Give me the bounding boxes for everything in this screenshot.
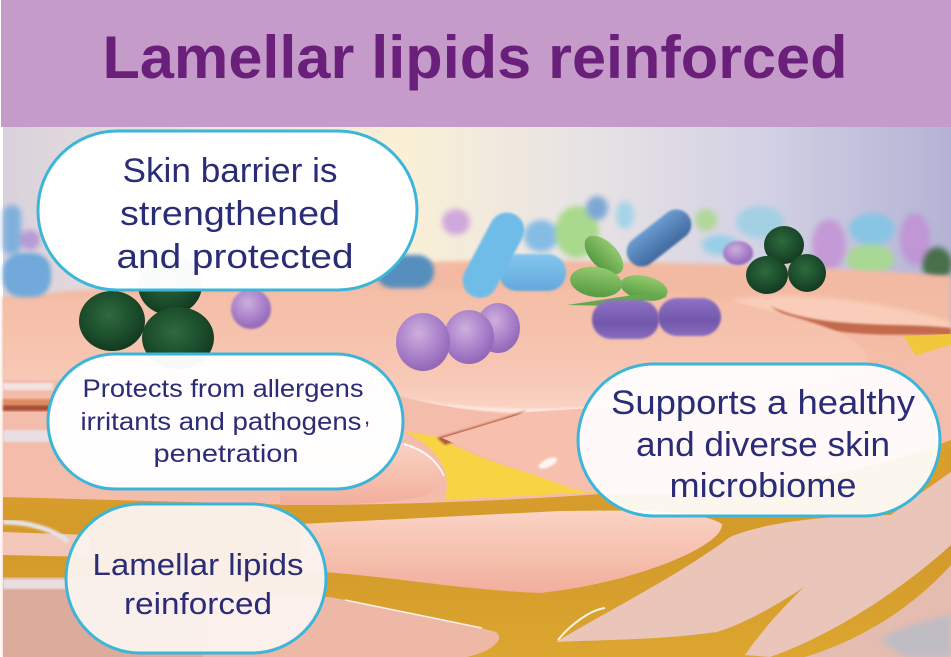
mid pink cell <box>3 345 951 505</box>
corner shadow <box>880 614 951 657</box>
brown crease <box>437 410 527 445</box>
callout: skin barrier: and protected <box>116 238 354 276</box>
right lobe highlight <box>730 296 951 332</box>
cell above yellow <box>442 400 720 492</box>
callout: microbiome <box>578 364 940 516</box>
left stripes <box>3 383 53 442</box>
cell left of yellow <box>280 440 440 505</box>
highlight on cell <box>537 455 559 471</box>
blurred distant microbes <box>3 196 951 281</box>
callout: skin barrier <box>38 131 417 290</box>
purple capsules <box>592 298 721 339</box>
left green cluster <box>79 255 214 369</box>
callout: protects: Protects from allergens <box>82 375 364 403</box>
skin surface <box>3 261 951 657</box>
callout: microbiome: and diverse skin <box>636 426 890 464</box>
callout: protects: , <box>364 404 370 429</box>
cell edge highlight <box>404 444 444 476</box>
lower right cell <box>556 515 900 642</box>
brown fold, right <box>770 306 951 335</box>
callout: protects: penetration <box>154 440 298 468</box>
title: Lamellar lipids reinforced <box>102 24 848 91</box>
small purple sphere <box>231 289 271 329</box>
purple sphere cluster <box>396 303 520 371</box>
large upper cell <box>3 289 868 413</box>
callout: protects <box>48 354 403 489</box>
callout: lamellar lipids: Lamellar lipids <box>92 547 304 582</box>
callout: skin barrier: Skin barrier is <box>122 152 338 190</box>
right cell <box>745 472 951 657</box>
callout: microbiome: microbiome <box>670 467 856 505</box>
green beans <box>567 229 670 306</box>
blue rods <box>3 203 697 304</box>
central lower cell <box>300 511 722 593</box>
cell rim highlight <box>400 392 700 414</box>
bright yellow triangle <box>404 431 600 500</box>
corner cell <box>805 565 951 657</box>
small purple sphere, right <box>723 241 753 265</box>
callout: skin barrier: strengthened <box>120 195 340 233</box>
lower right highlight <box>558 608 605 640</box>
header band <box>1 0 951 127</box>
callout: lamellar lipids <box>66 504 326 653</box>
left lower band <box>3 522 203 657</box>
right green cluster <box>746 226 826 294</box>
upper yellow, right <box>904 334 951 400</box>
microbes <box>3 203 826 371</box>
callout: lamellar lipids: reinforced <box>124 586 272 621</box>
lower left cell <box>200 592 499 657</box>
callout: protects: irritants and pathogens <box>80 408 362 436</box>
lower cell edge highlight <box>345 600 482 628</box>
gold layer <box>3 440 951 657</box>
callout: microbiome: Supports a healthy <box>611 384 915 422</box>
